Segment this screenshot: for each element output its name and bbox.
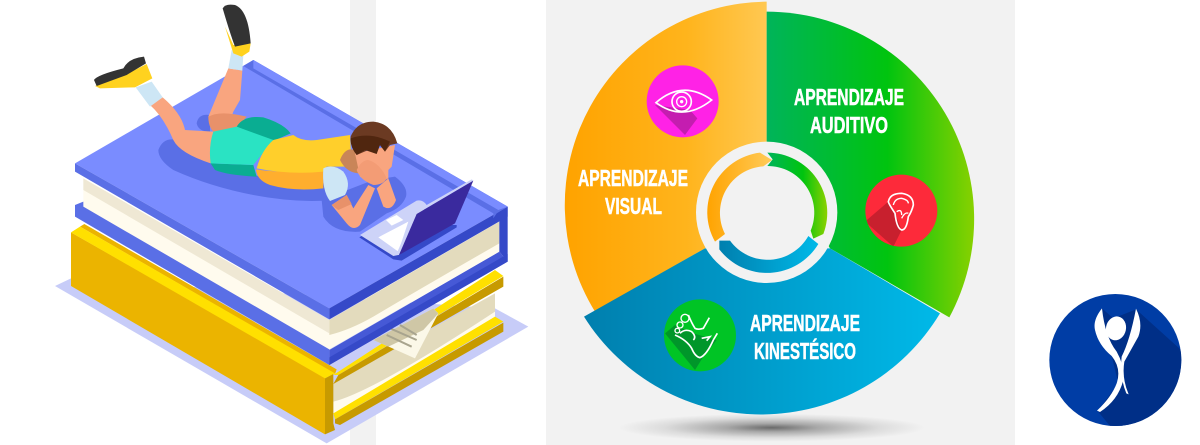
label: aprendizaje visual: VISUAL [605, 193, 662, 219]
label: aprendizaje kinestesico: APRENDIZAJE [750, 310, 860, 336]
illustration: child lying on stacked books [55, 5, 528, 443]
icon: ear [865, 175, 937, 247]
label: aprendizaje visual: APRENDIZAJE [578, 165, 688, 191]
icon: feet [664, 299, 736, 371]
yellow book [71, 224, 503, 434]
segment: auditivo [767, 12, 974, 317]
label: aprendizaje kinestesico [750, 310, 860, 364]
blue book [75, 60, 508, 365]
label: aprendizaje visual [578, 165, 688, 219]
segment: kinestesico [584, 248, 940, 414]
center ring [696, 142, 837, 283]
wheel shadow [618, 414, 925, 442]
label: aprendizaje kinestesico: KINESTÉSICO [754, 337, 856, 364]
body shadows [158, 115, 406, 232]
laptop [359, 179, 473, 261]
label: aprendizaje auditivo [794, 84, 904, 138]
icon: eye [647, 65, 719, 137]
ground shadow [55, 278, 528, 443]
label: aprendizaje auditivo: AUDITIVO [810, 112, 888, 138]
label: aprendizaje auditivo: APRENDIZAJE [794, 84, 904, 110]
learning styles wheel [565, 2, 974, 442]
cycle arrows [707, 153, 827, 273]
segment: visual [565, 2, 767, 312]
logo: white figure in blue circle [1049, 294, 1187, 430]
child figure [94, 5, 397, 228]
loose paper [373, 308, 438, 358]
